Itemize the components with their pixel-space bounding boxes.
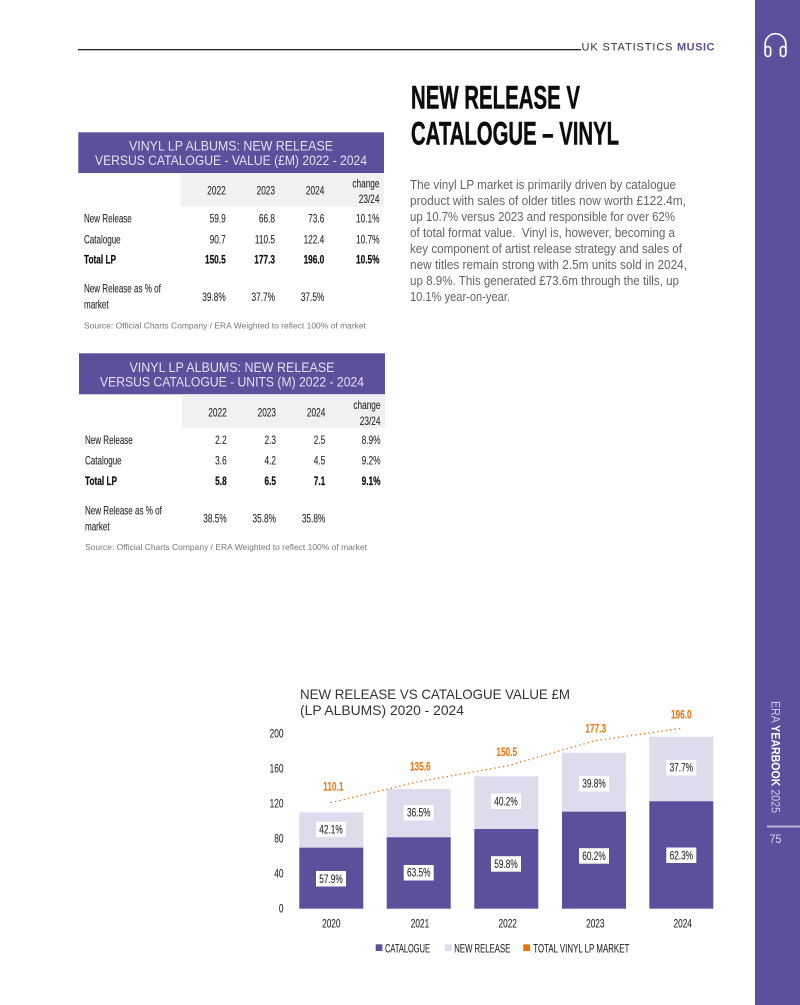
source note: units: Source: Official Charts Company / ERA Weighted to reflect 100% of market xyxy=(85,542,368,552)
table rows: units: 35.8% xyxy=(253,514,276,526)
y axis labels: 0 xyxy=(279,904,284,916)
percentage labels xyxy=(316,760,696,886)
table rows: value: 39.8% xyxy=(202,292,226,304)
table rows: value: 10.1% xyxy=(356,213,380,226)
table column headers: units: change xyxy=(353,400,381,412)
table rows: value: 59.9 xyxy=(210,213,226,226)
table heading: units xyxy=(79,353,385,394)
total market values: 196.0 xyxy=(671,709,692,722)
table rows: value: 122.4 xyxy=(304,234,325,247)
table rows: units: Catalogue xyxy=(85,455,122,468)
body text: new titles remain strong with 2.5m units sold in 2024, xyxy=(410,258,687,272)
y axis labels: 80 xyxy=(274,833,284,846)
x axis labels: 2020 xyxy=(322,919,341,931)
chart title: (LP ALBUMS) 2020 - 2024 xyxy=(300,702,464,718)
body text: up 8.9%. This generated £73.6m through the tills, up xyxy=(410,274,679,288)
table column headers: units: 2022 xyxy=(208,407,227,420)
table rows: units: 9.1% xyxy=(362,476,381,488)
table rows: value: 110.5 xyxy=(255,234,275,247)
stacked bar chart xyxy=(270,686,713,956)
table rows: units: 38.5% xyxy=(203,514,227,526)
table rows: value: 90.7 xyxy=(210,234,226,247)
body text: product with sales of older titles now worth £122.4m, xyxy=(410,194,686,208)
y axis labels xyxy=(270,728,284,916)
table rows: units: market xyxy=(85,521,110,534)
total market values xyxy=(323,709,692,794)
sidebar vertical text: era yearbook 2025: ERA YEARBOOK 2025 xyxy=(768,701,780,813)
table rows: value: 66.8 xyxy=(259,213,275,226)
bars: new release xyxy=(299,737,713,848)
table rows: value: Catalogue xyxy=(84,234,121,247)
table rows: value: 10.5% xyxy=(356,254,380,267)
section header: MUSIC xyxy=(677,42,715,54)
title: NEW RELEASE V xyxy=(411,80,580,116)
x axis labels xyxy=(322,919,692,931)
percentage labels: 37.7% xyxy=(670,763,693,775)
table heading: value: VERSUS CATALOGUE - VALUE (£M) 2022 - 2024 xyxy=(95,153,367,168)
total market values: 110.1 xyxy=(323,781,344,794)
total market values: 177.3 xyxy=(585,724,606,736)
x axis labels: 2022 xyxy=(498,919,517,931)
table rows: units: 2.5 xyxy=(314,435,326,447)
total market values: 150.5 xyxy=(496,747,517,759)
percentage labels: 39.8% xyxy=(582,779,606,791)
section header: UK STATISTICS xyxy=(582,42,672,54)
table rows: value: New Release xyxy=(84,213,132,226)
legend xyxy=(376,944,629,956)
table rows: value xyxy=(84,213,380,312)
total market dotted line xyxy=(331,728,682,803)
table rows: units: 2.2 xyxy=(215,435,227,447)
table rows: units xyxy=(85,435,381,534)
table rows: units: 6.5 xyxy=(264,476,276,488)
body text: The vinyl LP market is primarily driven by catalogue xyxy=(410,178,676,192)
legend: NEW RELEASE xyxy=(454,944,511,956)
table heading: value: VINYL LP ALBUMS: NEW RELEASE xyxy=(129,138,333,154)
table heading: units: VINYL LP ALBUMS: NEW RELEASE xyxy=(130,360,334,375)
percentage labels: 62.3% xyxy=(670,850,693,863)
table rows: value: 177.3 xyxy=(254,254,275,267)
x axis labels: 2023 xyxy=(586,919,605,931)
x axis labels: 2021 xyxy=(411,919,430,931)
table column headers: value: 23/24 xyxy=(359,194,380,206)
bars: catalogue xyxy=(299,801,713,909)
title: CATALOGUE – VINYL xyxy=(411,116,619,152)
table rows: units: 4.5 xyxy=(314,456,326,468)
table rows: units: 3.6 xyxy=(215,456,227,468)
percentage labels: 40.2% xyxy=(494,796,518,809)
percentage labels: 36.5% xyxy=(407,808,431,820)
title xyxy=(411,80,619,152)
table rows: units: 2.3 xyxy=(264,435,276,447)
sidebar panel xyxy=(755,0,800,1005)
table rows: units: New Release xyxy=(85,435,133,447)
table rows: units: New Release as % of xyxy=(85,505,162,518)
table rows: units: 7.1 xyxy=(314,476,326,488)
table rows: units: 8.9% xyxy=(362,435,381,447)
table column headers: units: 2024 xyxy=(307,407,326,420)
y axis labels: 200 xyxy=(270,728,284,741)
y axis labels: 120 xyxy=(270,798,284,811)
table column headers: units: 2023 xyxy=(258,407,276,420)
table rows: value: Total LP xyxy=(84,254,116,267)
table rows: units: Total LP xyxy=(85,476,117,488)
table heading: units: VERSUS CATALOGUE - UNITS (M) 2022 - 2024 xyxy=(100,374,364,390)
table: units xyxy=(79,353,385,552)
table rows: value: market xyxy=(84,299,109,312)
body text: up 10.7% versus 2023 and responsible for over 62% xyxy=(410,210,675,224)
table column headers: value: 2024 xyxy=(306,186,325,198)
table rows: value: 150.5 xyxy=(205,254,226,267)
source note: value: Source: Official Charts Company / ERA Weighted to reflect 100% of market xyxy=(84,320,367,330)
table rows: value: 196.0 xyxy=(304,254,325,267)
table heading: value xyxy=(78,132,384,173)
table rows: value: New Release as % of xyxy=(84,283,161,296)
table column headers: value xyxy=(181,173,384,207)
table column headers: value: 2023 xyxy=(257,186,275,198)
x axis labels: 2024 xyxy=(673,919,692,931)
percentage labels: 63.5% xyxy=(407,868,431,880)
percentage labels: 59.8% xyxy=(494,859,518,871)
table column headers: value: 2022 xyxy=(207,186,226,198)
table column headers: units xyxy=(182,394,385,428)
body text: key component of artist release strategy and sales of xyxy=(410,242,682,256)
table rows: units: 5.8 xyxy=(215,476,227,488)
table rows: value: 10.7% xyxy=(356,234,380,247)
table: value xyxy=(78,132,384,330)
y axis labels: 40 xyxy=(274,868,284,881)
table rows: units: 35.8% xyxy=(302,514,325,526)
chart title xyxy=(300,686,570,718)
table rows: value: 37.7% xyxy=(252,292,275,304)
table column headers: units: 23/24 xyxy=(360,416,381,428)
legend: TOTAL VINYL LP MARKET xyxy=(533,944,629,956)
percentage labels: 60.2% xyxy=(582,851,606,863)
body text: of total format value. Vinyl is, however, becoming a xyxy=(410,226,675,240)
section header xyxy=(78,42,715,54)
table rows: value: 73.6 xyxy=(308,213,325,226)
page number: 75 xyxy=(770,832,782,846)
percentage labels: 57.9% xyxy=(319,874,343,886)
percentage labels: 42.1% xyxy=(319,824,343,837)
y axis labels: 160 xyxy=(270,763,284,776)
legend: CATALOGUE xyxy=(385,944,430,956)
table rows: units: 4.2 xyxy=(264,456,276,468)
icon: headphones xyxy=(765,34,786,56)
table rows: units: 9.2% xyxy=(362,456,381,468)
body text xyxy=(410,178,687,304)
table rows: value: 37.5% xyxy=(301,292,324,304)
body text: 10.1% year-on-year. xyxy=(410,290,510,304)
table column headers: value: change xyxy=(352,178,380,191)
total market values: 135.6 xyxy=(410,762,431,774)
chart title: NEW RELEASE VS CATALOGUE VALUE £M xyxy=(300,686,570,702)
